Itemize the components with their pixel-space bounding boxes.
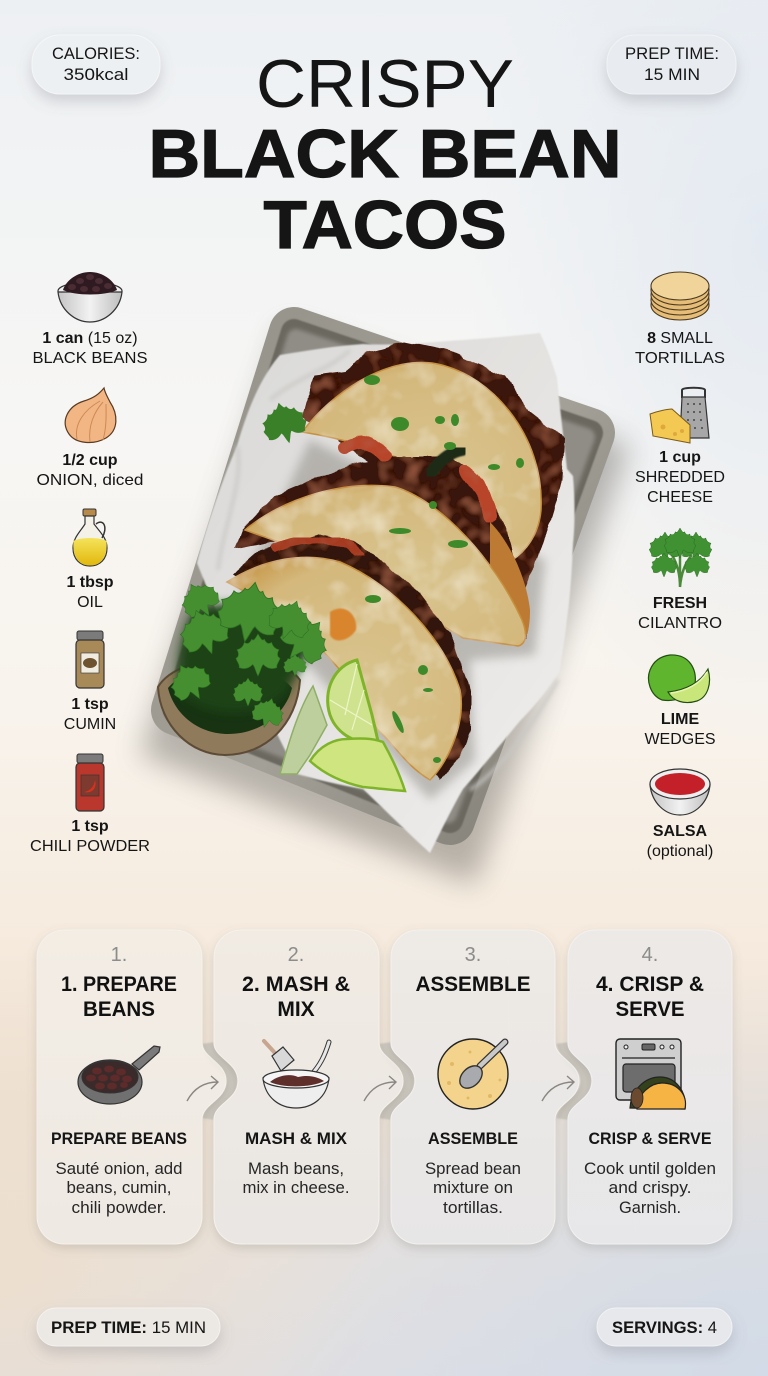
icon: chili powder jar bbox=[76, 754, 104, 811]
icon: oven with taco bbox=[616, 1039, 685, 1109]
arrow bbox=[364, 1076, 396, 1101]
pill: calories: 350kcal bbox=[64, 65, 128, 84]
step 3 card: tortillas. bbox=[443, 1199, 503, 1217]
tray shadow bbox=[140, 325, 630, 885]
pill: prep time bbox=[607, 35, 736, 94]
cilantro flecks bbox=[364, 375, 524, 763]
title: CRISPY bbox=[256, 46, 514, 122]
step 1 card: BEANS bbox=[83, 998, 155, 1021]
step 4 card: 4. bbox=[642, 944, 658, 966]
step 3 card: ASSEMBLE bbox=[428, 1129, 518, 1148]
parchment paper bbox=[197, 333, 574, 853]
step 2 card: 2. MASH & bbox=[242, 973, 350, 996]
connector gaps bbox=[208, 1043, 586, 1119]
title bbox=[148, 46, 622, 263]
step 4 card bbox=[568, 930, 732, 1244]
tray bbox=[176, 332, 590, 820]
lime wedges bbox=[280, 660, 405, 791]
ingredients: left column: OIL bbox=[77, 594, 103, 611]
step 3 card: 3. bbox=[465, 944, 481, 966]
ingredients: left column: CUMIN bbox=[64, 716, 116, 733]
step 2 card: mix in cheese. bbox=[242, 1179, 350, 1197]
icon: cumin jar bbox=[76, 631, 104, 688]
label: salsa: SALSA bbox=[653, 823, 708, 840]
label: lime: LIME bbox=[661, 711, 699, 728]
process steps bbox=[37, 930, 732, 1244]
ingredients: right column: CHEESE bbox=[647, 489, 713, 506]
icon: pan with beans bbox=[78, 1046, 160, 1104]
taco 1 bbox=[302, 342, 564, 590]
taco shadow on paper bbox=[240, 440, 545, 800]
step 1 card: Sauté onion, add bbox=[56, 1160, 182, 1178]
taco 3 bbox=[227, 534, 470, 780]
label: cumin: 1 tsp bbox=[71, 696, 109, 713]
step 2 card: Mash beans, bbox=[248, 1160, 344, 1178]
step 3 card: ASSEMBLE bbox=[416, 973, 530, 996]
step 2 card: MASH & MIX bbox=[245, 1129, 348, 1148]
ingredients: left column: CHILI POWDER bbox=[30, 838, 150, 855]
step 1 card: beans, cumin, bbox=[66, 1179, 172, 1197]
icon: oil bottle bbox=[73, 509, 107, 566]
step 1 card: PREPARE BEANS bbox=[51, 1129, 187, 1148]
icon: tortilla stack bbox=[651, 272, 709, 320]
ingredients: right column: TORTILLAS bbox=[635, 350, 725, 367]
step 4 card: SERVE bbox=[616, 998, 684, 1021]
label: tortillas: 8 bbox=[647, 330, 656, 347]
step 4 card: Cook until golden bbox=[584, 1160, 716, 1178]
step 4 card: Garnish. bbox=[619, 1199, 681, 1217]
pill: prep time: 15 MIN bbox=[644, 65, 700, 84]
title: TACOS bbox=[264, 187, 506, 263]
step 4 card: and crispy. bbox=[608, 1179, 692, 1197]
pill: servings bbox=[597, 1308, 732, 1346]
ingredients: right column: (optional) bbox=[647, 843, 713, 860]
ingredients: right column: SHREDDED bbox=[635, 469, 725, 486]
pill: servings: SERVINGS: 4 bbox=[612, 1318, 717, 1337]
label: cheese: 1 cup bbox=[659, 449, 701, 466]
label: cilantro: FRESH bbox=[653, 595, 707, 612]
label: chili powder: 1 tsp bbox=[71, 818, 109, 835]
step 1 card: 1. PREPARE bbox=[61, 973, 177, 996]
icon: cheese and grater bbox=[650, 388, 709, 443]
step 4 card: CRISP & SERVE bbox=[588, 1129, 712, 1148]
loose cilantro leaf bbox=[257, 397, 311, 449]
icon: mixing bowl bbox=[263, 1041, 329, 1108]
taco 2 bbox=[235, 442, 530, 646]
pill: prep time footer: PREP TIME: 15 MIN bbox=[51, 1318, 206, 1337]
ingredients: right column: WEDGES bbox=[644, 731, 716, 748]
step 3 card: Spread bean bbox=[425, 1160, 521, 1178]
ingredients: right column: CILANTRO bbox=[638, 615, 722, 632]
icon: salsa bowl bbox=[650, 769, 710, 815]
label: tortillas: SMALL bbox=[660, 330, 713, 347]
pill: calories: CALORIES: bbox=[52, 44, 140, 63]
arrow bbox=[187, 1076, 218, 1101]
title: BLACK BEAN bbox=[148, 116, 622, 192]
label: black beans: (15 oz) bbox=[88, 330, 138, 347]
icon: cilantro bbox=[649, 528, 712, 587]
ingredients: left column: BLACK BEANS bbox=[32, 350, 148, 367]
step 1 card: 1. bbox=[111, 944, 127, 966]
step 3 card bbox=[391, 930, 579, 1244]
label: onion: 1/2 cup bbox=[62, 452, 118, 469]
icon: lime wedges bbox=[648, 655, 710, 703]
ingredients: left column bbox=[30, 272, 150, 855]
label: black beans: 1 can bbox=[42, 330, 83, 347]
label: oil: 1 tbsp bbox=[66, 574, 114, 591]
pill: calories bbox=[32, 35, 160, 94]
step 2 card: MIX bbox=[277, 998, 315, 1021]
step 1 card bbox=[37, 930, 226, 1244]
step 3 card: mixture on bbox=[433, 1179, 513, 1197]
hero photo: tacos on a baking tray bbox=[140, 325, 630, 885]
ingredients: left column: ONION, diced bbox=[36, 472, 144, 489]
step 2 card bbox=[214, 930, 403, 1244]
step 4 card: 4. CRISP & bbox=[596, 973, 704, 996]
icon: bowl of black beans bbox=[58, 272, 122, 322]
ingredients: right column bbox=[635, 272, 725, 860]
arrow bbox=[542, 1076, 574, 1101]
step 1 card: chili powder. bbox=[72, 1199, 166, 1217]
icon: onion bbox=[65, 388, 116, 443]
wooden bowl with cilantro bbox=[158, 397, 338, 755]
pill: prep time footer bbox=[37, 1308, 220, 1346]
icon: tortilla with spoon bbox=[438, 1039, 508, 1109]
step 2 card: 2. bbox=[288, 944, 304, 966]
pill: prep time: PREP TIME: bbox=[625, 44, 719, 63]
